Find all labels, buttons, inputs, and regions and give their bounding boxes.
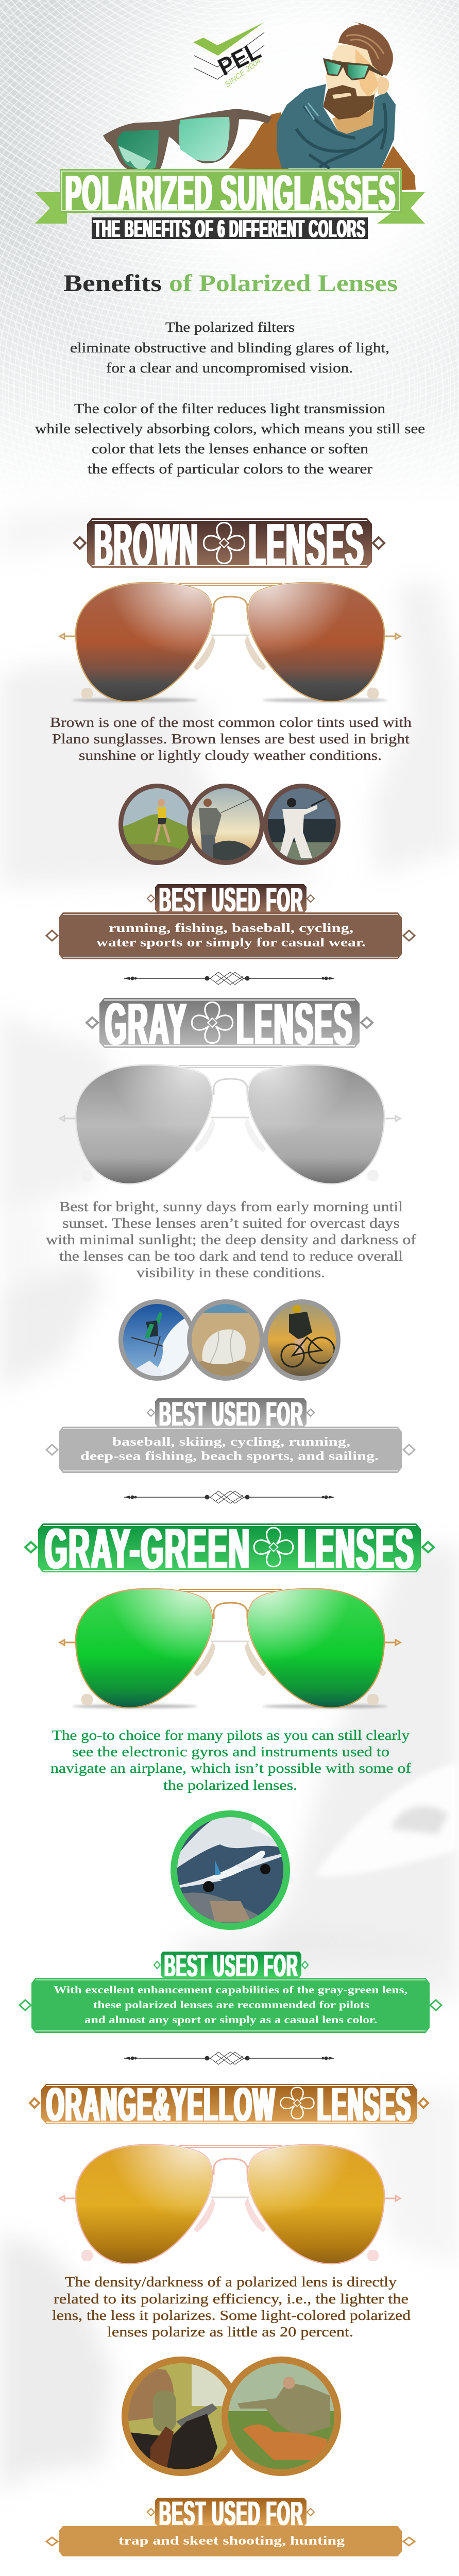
usage panel: brown: running, fishing, baseball, cycling, xyxy=(109,922,353,935)
logo: PEL since 2004: SINCE 2004 xyxy=(223,56,263,89)
gray-green description: see the electronic gyros and instruments used to xyxy=(72,1744,389,1759)
orange and yellow description: The density/darkness of a polarized lens is directly xyxy=(65,2274,397,2290)
background: brown section ghost runner and hills xyxy=(0,507,459,886)
heading: Brown Lenses: BROWN xyxy=(94,511,199,578)
photo: beach volleyball xyxy=(187,1299,264,1381)
brown description: sunshine or lightly cloudy weather conditions. xyxy=(79,748,382,763)
usage panel: brown xyxy=(46,912,415,959)
orange and yellow description: lens, the less it polarizes. Some light-colored polarized xyxy=(52,2308,411,2323)
brown description: Plano sunglasses. Brown lenses are best used in bright xyxy=(52,731,410,747)
logo: PEL since 2004 xyxy=(193,22,265,89)
best used for: gray-green: BEST USED FOR xyxy=(164,1948,298,1983)
best used for: brown: BEST USED FOR xyxy=(159,880,303,919)
photo: hunter and dog xyxy=(222,2357,341,2476)
best used for: gray xyxy=(147,1395,314,1433)
sunglasses: gray-green xyxy=(60,1589,400,1708)
usage panel: gray: baseball, skiing, cycling, running, xyxy=(112,1435,350,1449)
logo: PEL since 2004: PEL xyxy=(214,37,265,81)
divider xyxy=(124,1491,334,1503)
brown description: Brown is one of the most common color tints used with xyxy=(50,715,412,730)
gray-green description: The go-to choice for many pilots as you can still clearly xyxy=(52,1727,410,1743)
photo: baseball batter xyxy=(263,784,341,865)
usage panel: gray: deep-sea fishing, beach sports, and sailing. xyxy=(80,1450,379,1463)
usage panel: gray-green: With excellent enhancement capabilities of the gray-green lens, xyxy=(54,1984,407,1996)
heading: Benefits of Polarized Lenses xyxy=(63,270,398,297)
gray description: sunset. These lenses aren’t suited for overcast days xyxy=(62,1215,400,1231)
orange and yellow description xyxy=(52,2274,411,2340)
background: wire mesh header xyxy=(0,0,459,515)
brown description xyxy=(50,715,412,763)
usage panel: orange and yellow xyxy=(46,2526,415,2556)
sunglasses: gray xyxy=(60,1065,400,1184)
gray description: visibility in these conditions. xyxy=(137,1265,325,1280)
best used for: orange and yellow xyxy=(147,2494,314,2532)
usage panel: orange and yellow: trap and skeet shooting, hunting xyxy=(118,2534,345,2548)
sunglasses: orange and yellow xyxy=(60,2145,400,2264)
usage panel: gray-green: and almost any sport or simply as a casual lens color. xyxy=(84,2013,377,2026)
usage panel: brown: water sports or simply for casual wear. xyxy=(96,936,366,950)
divider xyxy=(124,972,334,985)
intro text: the effects of particular colors to the wearer xyxy=(88,461,372,477)
divider xyxy=(124,2052,334,2064)
intro text xyxy=(35,319,425,477)
illustration: bearded man with sunglasses xyxy=(228,22,416,190)
usage panel: gray-green: these polarized lenses are recommended for pilots xyxy=(93,1998,369,2011)
photo: fisherman xyxy=(187,784,264,865)
gray-green description xyxy=(50,1727,411,1793)
page background lower xyxy=(0,2071,459,2576)
gray description: with minimal sunlight; the deep density and darkness of xyxy=(46,1232,416,1247)
illustration: large sunglasses xyxy=(103,109,272,175)
orange and yellow description: lenses polarize as little as 20 percent. xyxy=(107,2324,353,2340)
intro text: eliminate obstructive and blinding glares of light, xyxy=(70,340,389,355)
heading: Gray Lenses: GRAY xyxy=(105,992,188,1057)
gray description: Best for bright, sunny days from early morning until xyxy=(59,1199,403,1214)
best used for: brown xyxy=(147,880,314,919)
background: orange section ghost shooter xyxy=(0,2092,459,2494)
heading: Gray-Green Lenses: GRAY-GREEN xyxy=(45,1517,251,1581)
heading: Gray Lenses xyxy=(87,992,372,1057)
photo: trap shooter xyxy=(122,2357,241,2476)
heading: Benefits of Polarized Lenses: of Polarized Lenses xyxy=(169,270,398,297)
photo: cyclist xyxy=(263,1299,341,1381)
photo: skier jump xyxy=(118,1299,196,1381)
best used for: gray-green xyxy=(154,1948,308,1983)
best used for: orange and yellow: BEST USED FOR xyxy=(159,2494,303,2532)
gray-green description: navigate an airplane, which isn’t possible with some of xyxy=(50,1760,411,1776)
intro text: while selectively absorbing colors, which means you still see xyxy=(35,421,425,436)
sunglasses: brown xyxy=(60,583,400,702)
orange and yellow description: related to its polarizing efficiency, i.e., the lighter the xyxy=(54,2291,409,2307)
intro text: color that lets the lenses enhance or soften xyxy=(92,441,369,456)
heading: Benefits of Polarized Lenses: Benefits xyxy=(63,270,162,297)
best used for: gray: BEST USED FOR xyxy=(159,1395,303,1433)
background: green section ghost airplane xyxy=(170,1546,459,1999)
usage panel: gray xyxy=(46,1427,415,1473)
intro text: The color of the filter reduces light transmission xyxy=(74,401,386,416)
intro text: The polarized filters xyxy=(165,319,295,335)
gray description xyxy=(46,1199,416,1280)
photo: airplane xyxy=(171,1810,290,1930)
usage panel: gray-green xyxy=(20,1978,441,2033)
background: gray section ghost skier and mountains xyxy=(0,1010,113,1391)
gray-green description: the polarized lenses. xyxy=(163,1777,297,1793)
photo: runner xyxy=(118,784,196,865)
intro text: for a clear and uncompromised vision. xyxy=(106,360,353,376)
gray description: the lenses can be too dark and tend to reduce overall xyxy=(59,1248,403,1264)
